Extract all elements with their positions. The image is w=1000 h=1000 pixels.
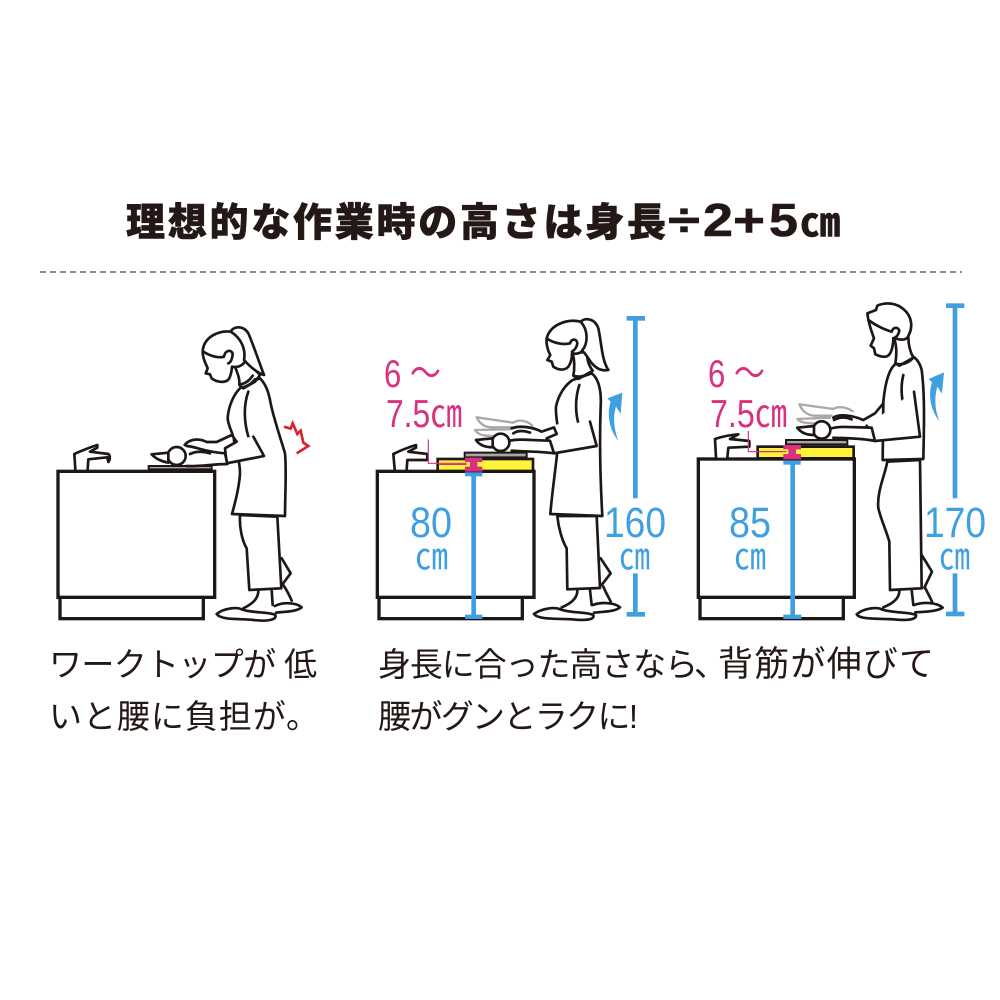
label: 85 cm [729,499,771,577]
title: 2 [703,194,733,246]
label: 170 cm: 170 [924,499,986,547]
title [126,194,840,246]
caption: right height [378,645,934,735]
icon: back pain mark [284,423,308,453]
panel: 160 cm person with 80 cm worktop [377,316,645,620]
height bracket: worktop 80 cm [465,472,482,619]
yellow extra height band [758,447,854,458]
panel: 170 cm person with 85 cm worktop [698,303,964,620]
label: 6 to 7.5 cm: 7.5㎝ [710,393,787,436]
cutting board [149,466,212,469]
height bracket: person 170 cm [946,303,964,616]
man standing [797,303,943,620]
ghost plates [797,404,855,423]
cabinet [58,471,215,619]
yellow extra height band [438,459,533,471]
pink added height marker [428,439,482,472]
faucet [74,445,110,469]
caption: right height: 、 [694,646,727,683]
faucet [715,434,749,458]
arrow: posture lifts up [607,393,622,441]
arrow: posture lifts up [929,372,944,421]
height bracket: worktop 85 cm [783,461,801,619]
title: 5 [769,194,798,246]
label: 6 to 7.5 cm [384,353,462,436]
label: 85 cm: 85 [729,499,771,547]
title: 理想的な作業時の高さは身長 [126,202,666,245]
label: 160 cm: ㎝ [619,536,650,577]
title: ㎝ [800,201,840,245]
label: 160 cm: 160 [604,499,666,547]
caption: right height: 腰がグンとラクに! [378,698,638,735]
title: ÷ [668,194,700,246]
label: 6 to 7.5 cm [708,353,787,436]
caption: low worktop [49,646,319,735]
label: 80 cm: 80 [410,499,452,547]
label: 170 cm [924,499,986,577]
pink added height marker [748,431,801,459]
caption: right height: 身長に合った高さなら [378,646,698,683]
cutting board [786,440,847,444]
label: 80 cm [410,499,452,577]
cabinet [377,471,534,619]
label: 6 to 7.5 cm: 6 ～ [708,353,765,396]
woman bending [152,327,302,621]
panel: low worktop, bent posture [58,327,308,621]
cutting board [465,453,527,457]
label: 160 cm [604,499,666,577]
label: 6 to 7.5 cm: 7.5㎝ [386,393,462,436]
label: 6 to 7.5 cm: 6 ～ [384,353,441,396]
label: 80 cm: ㎝ [415,536,448,577]
woman standing [476,319,620,620]
label: 85 cm: ㎝ [734,536,766,577]
cabinet [698,459,854,619]
caption: low worktop: ワークトップが 低 [49,646,317,683]
faucet [393,445,427,469]
title: + [733,194,765,246]
ghost plates [475,417,537,436]
label: 170 cm: ㎝ [939,536,970,577]
caption: right height: 背筋が伸びて [718,645,934,684]
caption: low worktop: いと腰に負担が。 [49,698,319,735]
height bracket: person 160 cm [627,316,645,617]
